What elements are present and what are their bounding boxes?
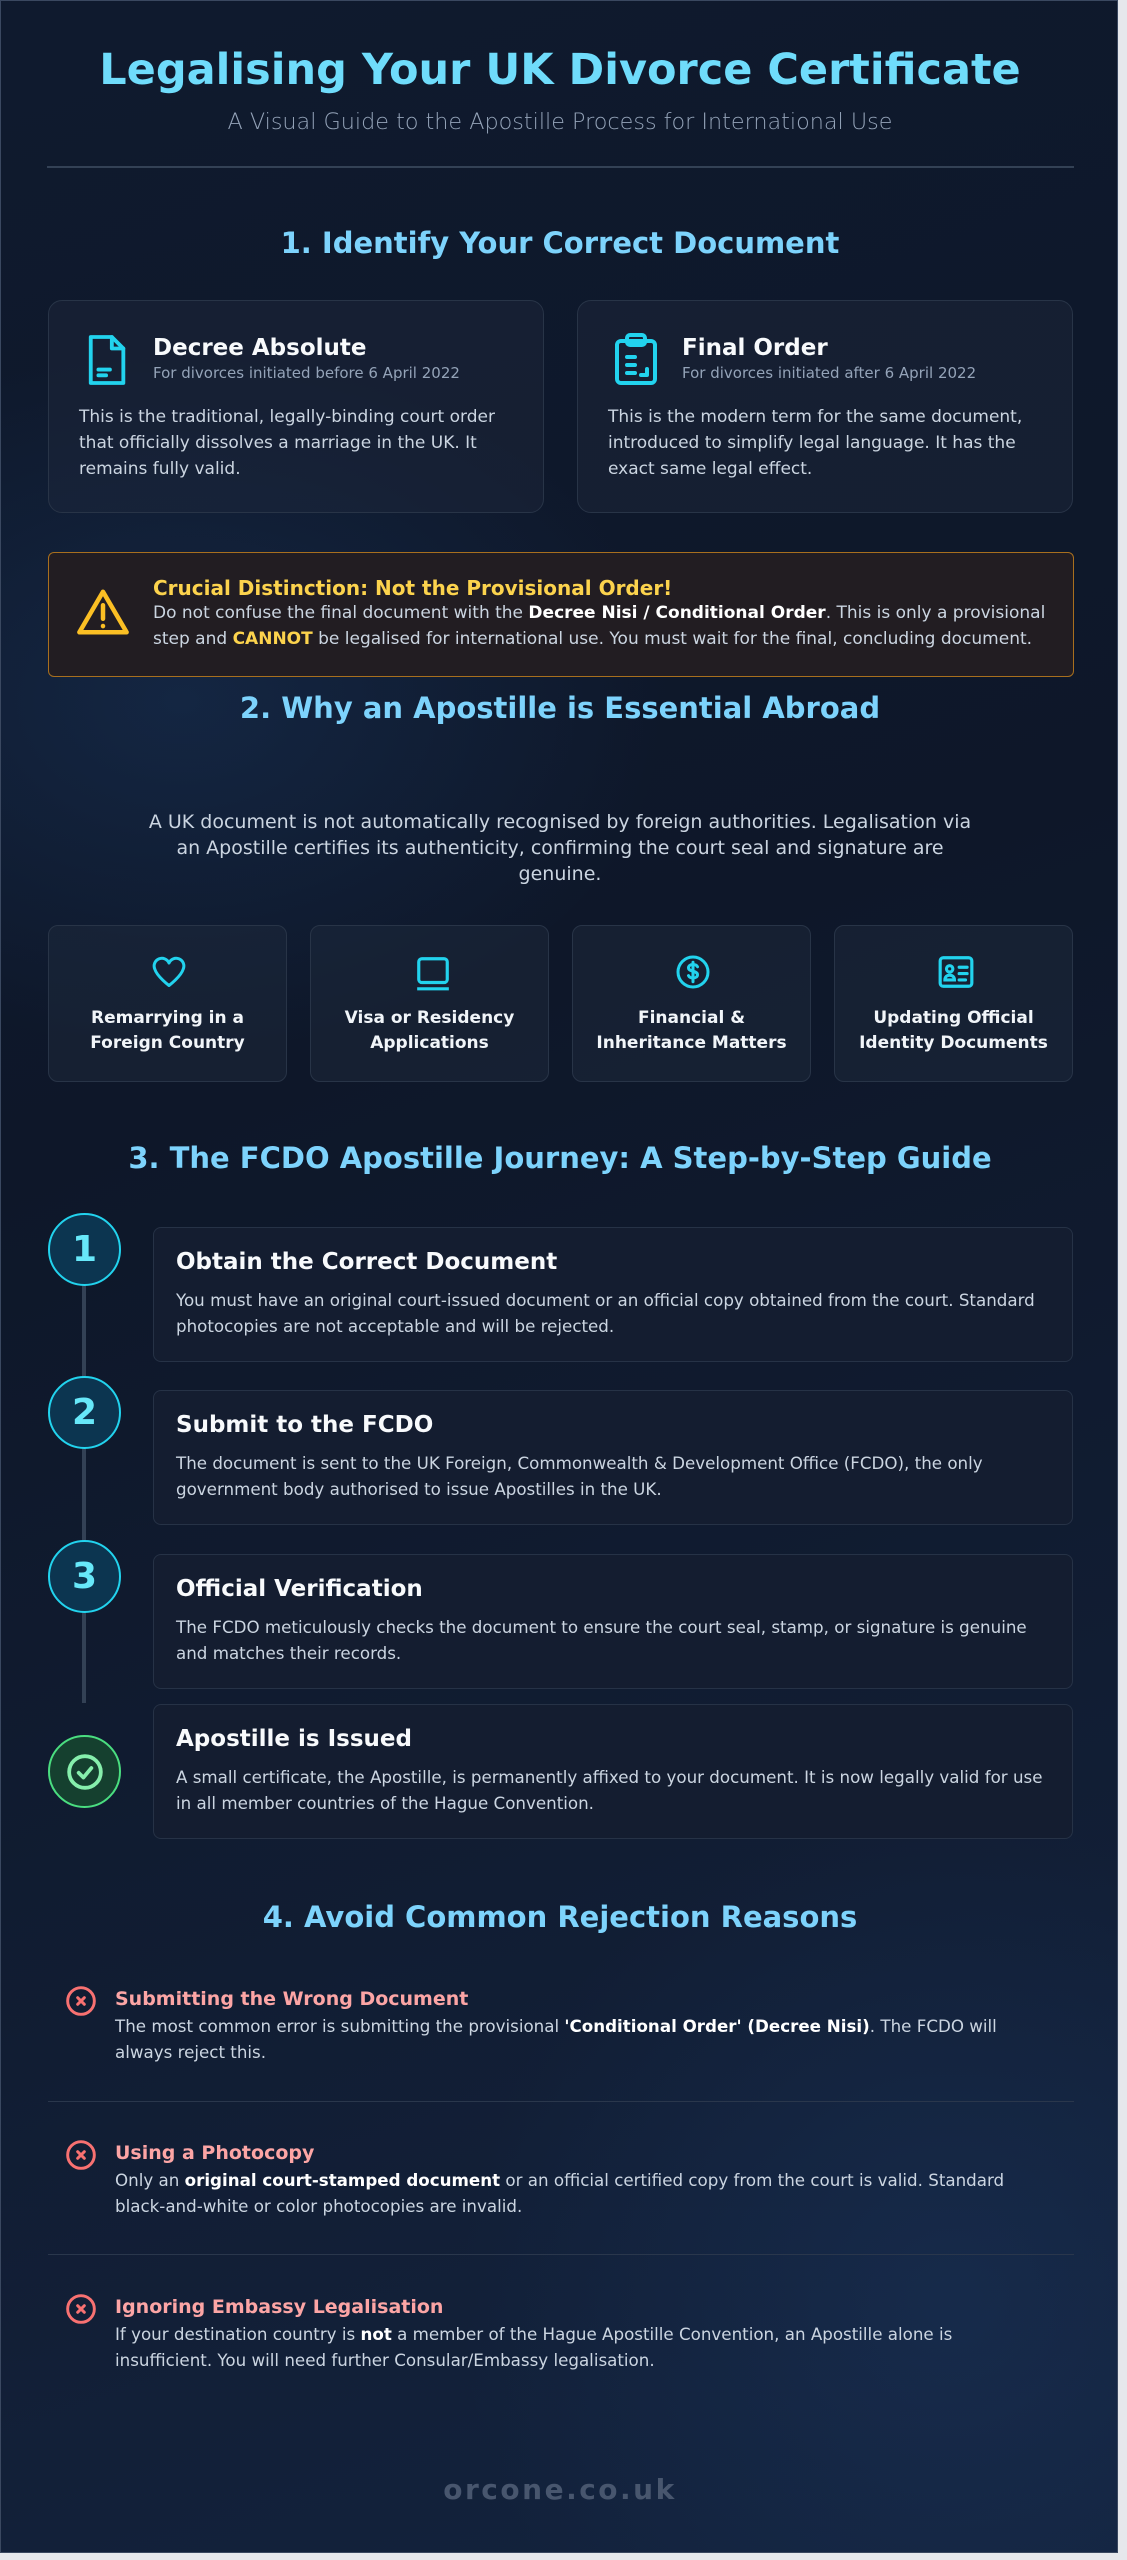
icon: check step [48, 1735, 121, 1808]
panel: remarrying: Foreign Country [90, 1033, 245, 1053]
panel: remarrying: Remarrying in a [91, 1008, 244, 1028]
step card 4: Apostille is Issued [176, 1726, 412, 1752]
card title: Final Order [682, 335, 828, 361]
heading: section 2: 2. Why an Apostille is Essential Abroad [240, 691, 880, 725]
step number 2 [48, 1376, 121, 1449]
subtitle: A Visual Guide to the Apostille Process for International Use [228, 109, 892, 135]
icon: document [88, 335, 126, 385]
text: Only an original court-stamped document or an official certified copy from the court is valid. Standard black-and-white or color photocopies are invalid. [115, 2170, 1004, 2216]
step card 1 [153, 1227, 1073, 1362]
icon: warning [77, 590, 129, 634]
icon: laptop [417, 957, 449, 990]
step card 3: The FCDO meticulously checks the document to ensure the court seal, stamp, or signature is genuine and matches their records. [176, 1617, 1027, 1663]
callout: crucial distinction [48, 552, 1074, 677]
heading: section 1: 1. Identify Your Correct Document [281, 226, 839, 260]
panel: visa: Visa or Residency [345, 1008, 514, 1028]
panel: remarrying [48, 925, 287, 1082]
panel: financial: Inheritance Matters [596, 1033, 787, 1053]
step number 3 [48, 1540, 121, 1613]
step card 1: Obtain the Correct Document [176, 1249, 557, 1275]
step number 2: 2 [72, 1392, 97, 1433]
panel: visa [310, 925, 549, 1082]
callout title: Crucial Distinction: Not the Provisional Order! [153, 576, 672, 600]
step card 4 [153, 1704, 1073, 1839]
text: Ignoring Embassy Legalisation [115, 2296, 443, 2318]
card subtitle: For divorces initiated before 6 April 2022 [153, 364, 460, 382]
step card 2: The document is sent to the UK Foreign, Commonwealth & Development Office (FCDO), the only government body authorised to issue Apostilles in the UK. [176, 1453, 983, 1499]
heading: section 3: 3. The FCDO Apostille Journey: A Step-by-Step Guide [128, 1141, 992, 1175]
step card 2 [153, 1390, 1073, 1525]
rejection: photocopy [66, 2140, 1004, 2216]
rejection: embassy [66, 2294, 952, 2370]
card text: This is the traditional, legally-binding court order that officially dissolves a marriage in the UK. It remains fully valid. [79, 407, 495, 479]
callout text: Do not confuse the final document with the Decree Nisi / Conditional Order. This is only a provisional step and CANNOT be legalised for international use. You must wait for the final, concluding document. [153, 603, 1045, 649]
rejection: wrong document [66, 1986, 997, 2062]
step card 2: Submit to the FCDO [176, 1412, 433, 1438]
card subtitle: For divorces initiated after 6 April 2022 [682, 364, 976, 382]
step card 4: A small certificate, the Apostille, is permanently affixed to your document. It is now legally valid for use in all member countries of the Hague Convention. [176, 1767, 1042, 1813]
panel: financial [572, 925, 811, 1082]
step number 3: 3 [72, 1556, 97, 1597]
panel: visa: Applications [370, 1033, 489, 1053]
icon: heart [152, 956, 186, 987]
panel: decree absolute [48, 300, 544, 513]
panel: identity documents [834, 925, 1073, 1082]
panel: identity documents: Updating Official [873, 1008, 1034, 1028]
panel: final order [577, 300, 1073, 513]
step number 1 [48, 1213, 121, 1286]
intro text: A UK document is not automatically recognised by foreign authorities. Legalisation via an Apostille certifies its authenticity, confirming the court seal and signature are genuine. [149, 811, 971, 885]
text: Using a Photocopy [115, 2142, 314, 2164]
icon: dollar [676, 956, 710, 988]
title: Legalising Your UK Divorce Certificate [99, 45, 1021, 95]
text: If your destination country is not a member of the Hague Apostille Convention, an Apostille alone is insufficient. You will need further Consular/Embassy legalisation. [115, 2324, 952, 2370]
panel: identity documents: Identity Documents [859, 1033, 1048, 1053]
card title: Decree Absolute [153, 335, 366, 361]
icon: id card [938, 956, 974, 988]
step card 1: You must have an original court-issued document or an official copy obtained from the court. Standard photocopies are not acceptable and will be rejected. [176, 1290, 1035, 1336]
icon: clipboard [615, 333, 657, 385]
step number 1: 1 [72, 1229, 97, 1270]
heading: section 4: 4. Avoid Common Rejection Reasons [263, 1900, 857, 1934]
step card 3 [153, 1554, 1073, 1689]
step card 3: Official Verification [176, 1576, 423, 1602]
footer: orcone.co.uk [443, 2473, 677, 2506]
card text: This is the modern term for the same document, introduced to simplify legal language. It has the exact same legal effect. [608, 407, 1022, 479]
panel: financial: Financial & [638, 1008, 745, 1028]
text: Submitting the Wrong Document [115, 1988, 468, 2010]
text: The most common error is submitting the provisional 'Conditional Order' (Decree Nisi). The FCDO will always reject this. [115, 2016, 997, 2062]
